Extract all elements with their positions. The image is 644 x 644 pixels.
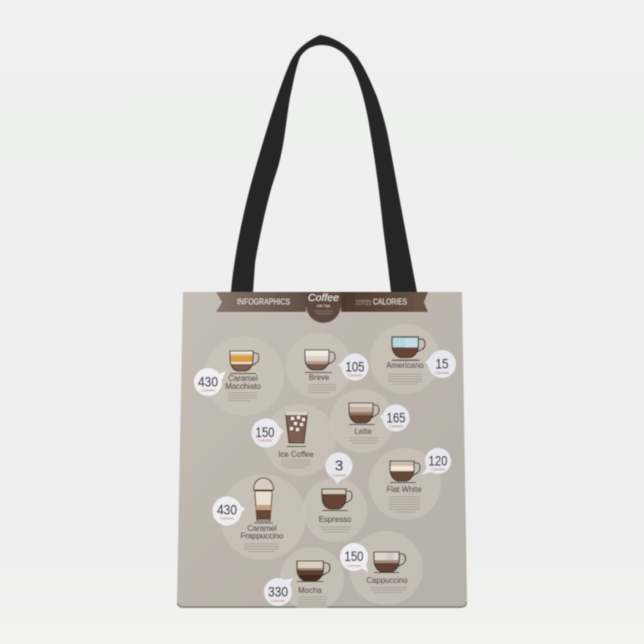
callout: 330 calories mocha: 330 <box>268 584 288 600</box>
label: Latte <box>354 427 372 436</box>
callout: 430 calories frappuccino: Calories <box>220 516 234 520</box>
description text lines <box>349 438 379 443</box>
callout: 150 calories ice coffee: 150 <box>256 424 275 440</box>
label: Ice Coffee <box>278 450 314 459</box>
callout: 165 calories latte: 165 <box>386 410 406 426</box>
callout: 165 calories latte <box>380 404 410 432</box>
callout: 430 calories frappuccino <box>212 496 245 526</box>
icon: cappuccino cup <box>374 552 406 572</box>
label: Flat White <box>386 485 422 494</box>
description text lines <box>370 588 407 592</box>
heading: counting calories: COUNTING <box>356 299 371 303</box>
callout: 120 calories flat white <box>421 448 451 475</box>
icon: flat white cup <box>390 461 420 482</box>
item: cappuccino <box>366 552 408 592</box>
callout: 120 calories flat white: 120 <box>428 452 448 468</box>
item: mocha <box>297 561 330 604</box>
callout: 3 calories espresso: 3 <box>335 458 343 474</box>
callout: 430 calories macchiato: Calories <box>201 388 215 392</box>
description text lines <box>308 385 336 392</box>
badge: coffee with tips <box>306 292 341 323</box>
callout: 150 calories ice coffee: Calories <box>258 438 272 442</box>
icon: mocha cup <box>297 561 330 582</box>
label: Frappuccino <box>241 532 284 540</box>
item: espresso <box>319 489 352 532</box>
callout: 120 calories flat white: Calories <box>431 468 445 472</box>
label: Mocha <box>298 586 322 595</box>
callout: 105 calories breve: 105 <box>346 358 365 374</box>
description text lines <box>281 460 311 468</box>
description text lines <box>298 597 327 604</box>
badge: coffee with tips: with Tips <box>317 304 331 308</box>
callout: 15 calories americano <box>425 350 456 378</box>
heading: counting calories <box>356 298 407 306</box>
label: Breve <box>309 373 329 382</box>
description text lines <box>228 393 257 400</box>
bag bottom shadow <box>177 601 467 608</box>
badge: coffee with tips: Coffee <box>308 292 339 304</box>
callout: 430 calories macchiato <box>194 368 226 396</box>
description text lines <box>389 497 420 512</box>
callout: 105 calories breve <box>338 354 368 380</box>
callout: 150 calories cappuccino: Calories <box>347 564 361 568</box>
banner ribbon left <box>216 292 306 312</box>
item: caramel macchiato <box>225 351 261 400</box>
item: flat white <box>386 461 422 512</box>
callout: 150 calories ice coffee <box>252 418 284 448</box>
icon: ice coffee glass <box>286 412 308 446</box>
icon: latte cup <box>349 403 379 424</box>
callout: 105 calories breve: Calories <box>348 374 362 378</box>
item: ice coffee <box>278 412 314 468</box>
callout: 430 calories macchiato: 430 <box>198 374 218 390</box>
icon: caramel macchiato cup <box>230 351 259 374</box>
item: caramel frappuccino <box>241 478 284 552</box>
callout: 150 calories cappuccino: 150 <box>344 548 364 564</box>
heading: infographics: INFOGRAPHICS <box>237 298 290 306</box>
heading: counting calories: CALORIES <box>373 298 407 306</box>
label: Cappuccino <box>366 576 408 585</box>
callout: 330 calories mocha <box>264 578 293 606</box>
icon: frappuccino glass <box>254 478 274 523</box>
description text lines <box>321 527 351 532</box>
callout: 150 calories cappuccino <box>340 543 368 573</box>
label: Americano <box>386 361 424 370</box>
callout: 165 calories latte: Calories <box>389 424 403 428</box>
callout: 15 calories americano: 15 <box>436 356 449 372</box>
label: Caramel <box>228 374 258 383</box>
icon: americano cup <box>392 337 425 360</box>
icon: breve cup <box>305 350 335 372</box>
description text lines <box>388 374 422 384</box>
label: Espresso <box>319 515 352 524</box>
label: Caramel <box>247 524 277 533</box>
item: americano <box>386 337 425 384</box>
item: latte <box>349 403 379 443</box>
callout: 3 calories espresso <box>326 452 352 484</box>
heading: counting calories: COFFEE <box>356 302 371 306</box>
callout: 430 calories frappuccino: 430 <box>217 502 237 518</box>
item: breve <box>305 350 336 392</box>
tote bag body <box>177 292 467 608</box>
label: Macchiato <box>225 382 261 391</box>
description text lines <box>244 544 279 552</box>
bag handle strap <box>231 35 417 292</box>
callout: 330 calories mocha: Calories <box>271 599 285 603</box>
panel: coffee circles <box>204 324 441 611</box>
callout: 15 calories americano: Calories <box>435 371 449 375</box>
icon: espresso cup <box>322 489 352 510</box>
banner ribbon right <box>341 292 428 312</box>
callout: 3 calories espresso: Calories <box>332 474 346 478</box>
